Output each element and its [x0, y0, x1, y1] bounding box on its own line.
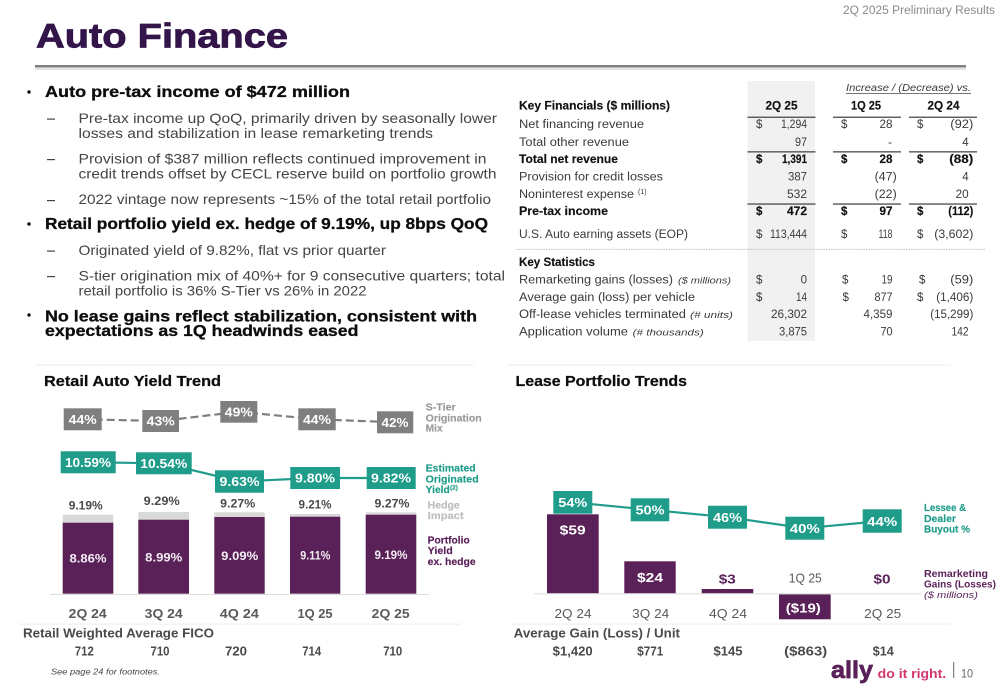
stacked bar: 3Q 24: 8.99% — [145, 550, 183, 564]
row: total other revenue: 4 — [962, 137, 969, 149]
page number: 10 — [961, 666, 973, 680]
row: earning assets: 113,444 — [770, 229, 808, 241]
x-axis labels — [554, 571, 901, 621]
x-axis labels: 4Q 24 — [220, 606, 260, 621]
stacked bar: 2Q 25: 9.27% — [374, 496, 410, 510]
row: remarketing gains: 0 — [801, 274, 807, 286]
row: remarketing gains: (59) — [950, 274, 973, 286]
row: net financing revenue: $ — [756, 119, 763, 131]
legend: s-tier origination mix — [426, 403, 482, 435]
legend: hedge impact: Hedge — [428, 500, 460, 511]
line chart: lessee and dealer buyout — [553, 491, 902, 540]
line chart: s-tier origination mix — [64, 401, 413, 433]
x-axis labels: 1Q 25 — [298, 606, 332, 621]
x-axis labels — [69, 606, 410, 621]
legend: lessee and dealer buyout: Lessee & — [924, 503, 966, 514]
row: application volume: 142 — [952, 326, 968, 338]
stacked bar: 4Q 24: 9.27% — [220, 497, 256, 511]
sub-bullet: s-tier mix: S-tier origination mix of 40%+ for 9 consecutive quarters; total — [78, 268, 505, 284]
legend: portfolio yield ex. hedge: Portfolio — [428, 535, 470, 546]
bar: remarketing gains 4Q 24 — [702, 571, 753, 593]
line chart: lessee and dealer buyout: 44% — [867, 514, 898, 529]
stacked bar: 3Q 24 — [138, 494, 189, 594]
table: average gain per unit — [514, 625, 895, 658]
legend: portfolio yield ex. hedge — [428, 535, 476, 568]
legend: estimated originated yield: Originated — [426, 474, 479, 485]
x-axis labels: 4Q 24 — [709, 606, 747, 621]
footnote: See page 24 for footnotes. — [51, 667, 160, 677]
legend: s-tier origination mix: Origination — [426, 413, 482, 424]
legend: s-tier origination mix: S-Tier — [426, 403, 456, 414]
heading: key statistics: Key Statistics — [519, 257, 595, 269]
line chart: estimated originated yield: 9.80% — [295, 470, 335, 486]
stacked bar: 1Q 25 — [290, 497, 340, 594]
table: retail weighted average FICO: 712 — [75, 643, 94, 658]
x-axis labels: 2Q 25 — [372, 606, 410, 621]
logo: ally do it right: ally — [831, 657, 873, 684]
x-axis labels: 3Q 24 — [145, 606, 184, 621]
line chart: s-tier origination mix: 49% — [225, 405, 253, 420]
table: retail weighted average FICO: Retail Weighted Average FICO — [23, 625, 214, 640]
legend: hedge impact — [428, 500, 464, 522]
legend: estimated originated yield — [426, 464, 479, 496]
bar value: 2Q 25: $0 — [874, 571, 890, 586]
column headers: 2Q 25 — [766, 100, 798, 112]
stacked bar: 3Q 24: 9.29% — [144, 494, 180, 508]
x-axis labels: 1Q 25 — [789, 571, 822, 586]
row: total other revenue: 97 — [795, 137, 807, 149]
row: remarketing gains: $ — [842, 274, 849, 286]
legend: lessee and dealer buyout — [924, 503, 970, 536]
legend: hedge impact: Impact — [428, 511, 464, 522]
stacked bar: 4Q 24: 9.09% — [221, 549, 259, 563]
logo: ally do it right — [831, 657, 946, 684]
row: application volume: Application volume — [519, 326, 628, 338]
row: remarketing gains: 19 — [882, 274, 892, 286]
row: total net revenue: $ — [841, 154, 848, 166]
line chart: s-tier origination mix: 42% — [382, 415, 409, 430]
legend: lessee and dealer buyout: Buyout % — [924, 525, 970, 536]
sub-bullet: provision: Provision of $387 million reflects continued improvement in — [78, 150, 486, 166]
row: pre-tax income: 472 — [787, 206, 807, 218]
legend: lessee and dealer buyout: Dealer — [924, 514, 956, 525]
legend: remarketing gains: Remarketing — [924, 569, 988, 580]
line chart: estimated originated yield: 10.59% — [65, 455, 111, 470]
row: earning assets: 118 — [878, 229, 892, 241]
bar: remarketing gains 4Q 24: $3 — [719, 571, 736, 586]
sub-bullet: originated yield: Originated yield of 9.82%, flat vs prior quarter — [78, 242, 386, 258]
row: total net revenue — [519, 154, 973, 166]
row: earning assets: $ — [917, 229, 924, 241]
legend: remarketing gains — [924, 569, 996, 601]
table: retail weighted average FICO — [23, 625, 402, 658]
row: remarketing gains: Remarketing gains (losses) — [519, 274, 673, 286]
row: total net revenue: $ — [917, 154, 924, 166]
header rule — [35, 65, 966, 70]
bullet: no lease gains — [27, 308, 477, 340]
sub-bullet: s-tier mix: retail portfolio is 36% S-Tier vs 26% in 2022 — [78, 282, 367, 298]
column headers: 1Q 25 — [851, 100, 882, 112]
bar: remarketing losses 1Q 25: ($19) — [786, 601, 821, 616]
bullet: no lease gains: expectations as 1Q headwinds eased — [45, 323, 358, 340]
line chart: estimated originated yield — [61, 451, 416, 493]
row: average gain per vehicle: 877 — [874, 292, 892, 304]
line chart: lessee and dealer buyout: 50% — [636, 502, 665, 518]
row: total other revenue: Total other revenue — [519, 137, 629, 149]
row: application volume — [519, 326, 968, 338]
row: earning assets: $ — [756, 229, 763, 241]
bullet: auto pre-tax income: Auto pre-tax income of $472 million — [45, 84, 350, 101]
stacked bar: 4Q 24 — [214, 497, 265, 594]
row: noninterest expense: 20 — [956, 189, 969, 201]
row: noninterest expense — [519, 189, 969, 201]
line chart: lessee and dealer buyout: 54% — [558, 495, 588, 510]
sub-bullet: provision — [47, 150, 497, 182]
row: net financing revenue — [519, 119, 973, 131]
stacked bar: 2Q 24: 8.86% — [70, 552, 107, 566]
line chart: s-tier origination mix: 44% — [69, 412, 97, 427]
x-axis labels: 3Q 24 — [632, 606, 669, 621]
row: provision for credit losses — [519, 172, 969, 184]
row: pre-tax income: Pre-tax income — [519, 206, 608, 218]
row: remarketing gains: ($ millions) — [678, 276, 731, 286]
x-axis labels: 2Q 24 — [554, 606, 592, 621]
row: total net revenue: $ — [756, 154, 763, 166]
row: remarketing gains: $ — [919, 274, 926, 286]
row: provision for credit losses: 387 — [788, 172, 807, 184]
legend: estimated originated yield: (2) — [450, 484, 458, 492]
row: total net revenue: Total net revenue — [519, 154, 618, 166]
stacked bar: 1Q 25: 9.21% — [298, 497, 332, 511]
row: pre-tax income: $ — [917, 206, 924, 218]
bar: remarketing losses 1Q 25 — [779, 594, 831, 619]
row: average gain per vehicle — [519, 292, 973, 304]
table: average gain per unit: $145 — [714, 643, 742, 658]
row: application volume: (# thousands) — [633, 328, 704, 338]
row: net financing revenue: 1,294 — [781, 119, 808, 131]
sub-bullet: pre-tax income up — [47, 110, 497, 141]
table: retail weighted average FICO: 710 — [150, 643, 170, 658]
table: average gain per unit: $14 — [873, 643, 895, 658]
panel: key financials table — [516, 81, 986, 341]
row: provision for credit losses: 4 — [962, 172, 969, 184]
line chart: s-tier origination mix: 44% — [303, 412, 331, 427]
highlighted 2Q 25 column — [748, 81, 815, 341]
line chart: lessee and dealer buyout: 46% — [713, 510, 742, 525]
row: average gain per vehicle: (1,406) — [936, 292, 973, 304]
legend: remarketing gains: Gains (Losses) — [924, 579, 996, 590]
sub-bullet: s-tier mix — [47, 268, 505, 298]
table: average gain per unit: $771 — [637, 643, 663, 658]
row: off-lease vehicles terminated: 26,302 — [771, 309, 807, 321]
header label: period: 2Q 2025 Preliminary Results — [843, 5, 995, 17]
sub-bullet: pre-tax income up: Pre-tax income up QoQ, primarily driven by seasonally lower — [78, 110, 497, 126]
bullet: no lease gains: No lease gains reflect stabilization, consistent with — [45, 308, 477, 326]
row: total other revenue — [519, 137, 969, 149]
title: Auto Finance — [36, 18, 288, 56]
stacked bar: 2Q 25 — [366, 496, 416, 594]
table: average gain per unit: Average Gain (Loss) / Unit — [514, 625, 681, 640]
row: noninterest expense: 532 — [787, 189, 807, 201]
panel: lease portfolio trends — [510, 373, 996, 658]
row: earning assets: $ — [841, 229, 848, 241]
row: provision for credit losses: Provision for credit losses — [519, 172, 663, 184]
bar: remarketing gains 2Q 24 — [547, 514, 599, 593]
row: average gain per vehicle: $ — [842, 292, 850, 304]
table: average gain per unit: ($863) — [784, 643, 827, 658]
row: provision for credit losses: (47) — [875, 172, 897, 184]
line chart: lessee and dealer buyout: 40% — [790, 521, 820, 536]
row: noninterest expense: Noninterest expense — [519, 189, 634, 201]
table: retail weighted average FICO: 714 — [302, 643, 322, 658]
table: retail weighted average FICO: 710 — [383, 643, 402, 658]
row: earning assets: (3,602) — [934, 229, 973, 241]
row: remarketing gains — [519, 274, 973, 286]
row: off-lease vehicles terminated — [519, 309, 973, 321]
column headers: Key Financials ($ millions) — [519, 100, 670, 112]
row: total net revenue: 1,391 — [782, 154, 808, 166]
row: net financing revenue: (92) — [950, 119, 973, 131]
row: off-lease vehicles terminated: 4,359 — [864, 309, 892, 321]
table: average gain per unit: $1,420 — [553, 643, 593, 658]
row: average gain per vehicle: $ — [756, 292, 763, 304]
legend: remarketing gains: ($ millions) — [924, 590, 978, 601]
stacked bar: 2Q 25: 9.19% — [374, 548, 408, 562]
bar: remarketing gains 3Q 24 — [624, 561, 676, 593]
row: earning assets — [519, 229, 973, 241]
line chart: estimated originated yield: 9.63% — [220, 474, 260, 489]
table: retail weighted average FICO: 720 — [225, 643, 247, 658]
row: average gain per vehicle: 14 — [796, 292, 808, 304]
stacked bar: 2Q 24 — [63, 498, 113, 594]
legend: s-tier origination mix: Mix — [426, 424, 443, 435]
row: net financing revenue: $ — [841, 119, 848, 131]
legend: portfolio yield ex. hedge: ex. hedge — [428, 557, 476, 568]
comparison header: Increase / (Decrease) vs. — [846, 83, 971, 94]
stacked bar: 1Q 25: 9.11% — [300, 549, 331, 563]
column headers — [519, 100, 960, 112]
bullet: retail portfolio yield: Retail portfolio yield ex. hedge of 9.19%, up 8bps QoQ — [45, 216, 488, 233]
legend: portfolio yield ex. hedge: Yield — [428, 546, 453, 557]
legend: estimated originated yield: Estimated — [426, 464, 476, 475]
row: pre-tax income — [519, 206, 973, 218]
row: noninterest expense: (22) — [875, 189, 897, 201]
row: pre-tax income: $ — [756, 206, 763, 218]
sub-bullet: provision: credit trends offset by CECL reserve build on portfolio growth — [78, 166, 497, 182]
x-axis labels: 2Q 24 — [69, 606, 108, 621]
row: off-lease vehicles terminated: (15,299) — [930, 309, 973, 321]
row: application volume: 3,875 — [779, 326, 807, 338]
row: off-lease vehicles terminated: (# units) — [690, 310, 733, 321]
row: pre-tax income: (112) — [948, 206, 973, 218]
heading: Lease Portfolio Trends — [516, 373, 687, 390]
row: off-lease vehicles terminated: Off-lease vehicles terminated — [519, 309, 686, 321]
row: net financing revenue: $ — [917, 119, 924, 131]
row: net financing revenue: 28 — [880, 119, 892, 131]
row: total net revenue: 28 — [880, 154, 893, 166]
row: remarketing gains: $ — [756, 274, 763, 286]
stacked bar: 2Q 24: 9.19% — [69, 498, 103, 512]
panel: key takeaways — [27, 84, 505, 340]
x-axis labels: 2Q 25 — [864, 606, 901, 621]
sub-bullet: pre-tax income up: losses and stabilization in lease remarketing trends — [78, 125, 433, 141]
row: average gain per vehicle: Average gain (loss) per vehicle — [519, 292, 695, 304]
legend: estimated originated yield: Yield — [426, 485, 450, 496]
logo: ally do it right: do it right. — [878, 666, 946, 681]
bar: remarketing gains 3Q 24: $24 — [637, 570, 664, 585]
row: total other revenue: - — [888, 137, 892, 149]
row: pre-tax income: 97 — [880, 206, 892, 218]
bar: remarketing gains 2Q 24: $59 — [560, 523, 586, 538]
heading: Retail Auto Yield Trend — [44, 373, 221, 390]
row: noninterest expense: (1) — [638, 189, 647, 196]
row: net financing revenue: Net financing revenue — [519, 119, 644, 131]
column headers: 2Q 24 — [928, 100, 960, 112]
row: pre-tax income: $ — [841, 206, 848, 218]
row: earning assets: U.S. Auto earning assets (EOP) — [519, 229, 688, 241]
row: application volume: 70 — [880, 326, 892, 338]
panel: retail auto yield trend — [20, 373, 482, 658]
row: average gain per vehicle: $ — [917, 292, 924, 304]
line chart: s-tier origination mix: 43% — [147, 414, 175, 429]
sub-bullet: 2022 vintage: 2022 vintage now represents ~15% of the total retail portfolio — [78, 191, 491, 207]
line chart: estimated originated yield: 9.82% — [371, 470, 411, 486]
line chart: estimated originated yield: 10.54% — [140, 456, 188, 471]
row: total net revenue: (88) — [949, 154, 973, 166]
